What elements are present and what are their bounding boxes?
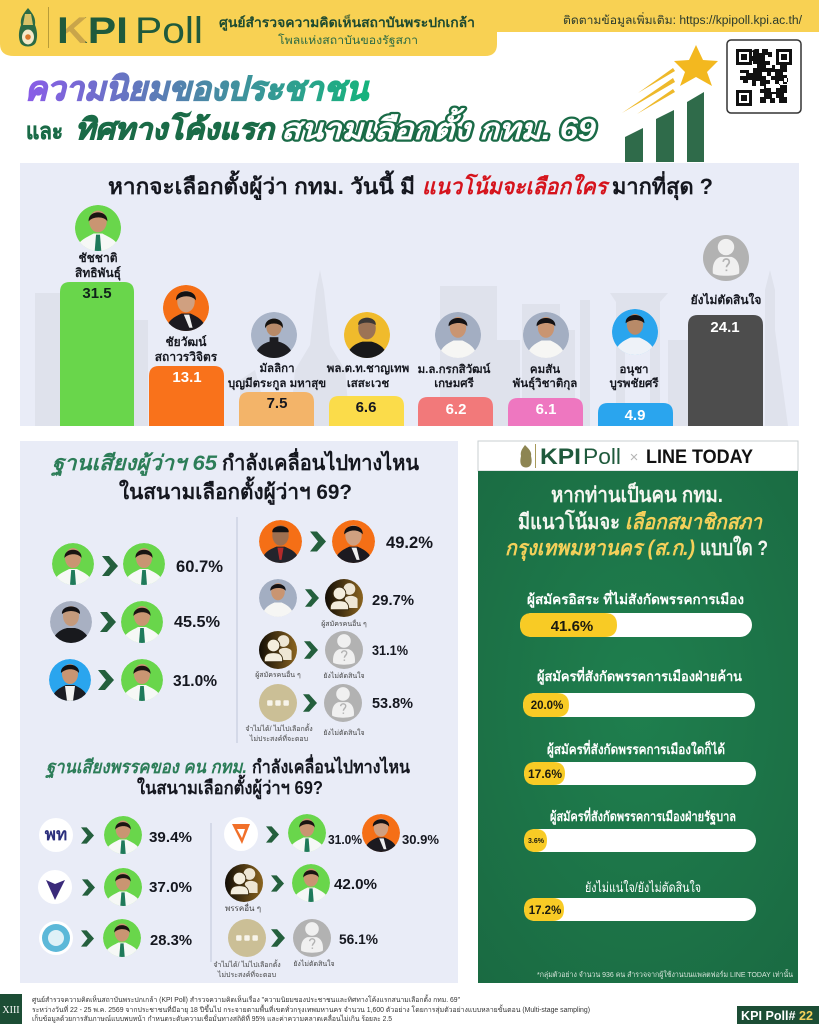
bar: any party 17.6%: ผู้สมัครที่สังกัดพรรคการเมืองใดก็ได้ xyxy=(547,739,725,758)
row: orange to Chaiwat 49.2% xyxy=(259,520,433,563)
row: no answer to undecided 56.1%: 56.1% xyxy=(339,931,379,947)
logo: KPI Poll: KPI xyxy=(57,10,128,51)
logo: KPI Poll x LINE TODAY: KPI xyxy=(540,444,581,469)
panel: mayor voting intention xyxy=(20,163,799,426)
bar: Anucha 4.9 xyxy=(598,309,673,426)
bar: Mallika 7.5 xyxy=(228,312,326,426)
main title line 2: สนามเลือกตั้ง กทม. 69 xyxy=(281,107,596,146)
badge: KPI Poll 22: KPI Poll# 22 xyxy=(741,1008,813,1023)
bar: Komsan 6.1: พันธุ์วิชาติกุล xyxy=(513,376,577,391)
heading: party base: ฐานเสียงพรรคของ คน กทม. xyxy=(45,757,247,779)
row: Wiroj to Chatchart 45.5% xyxy=(50,601,220,643)
heading: governor 65 base xyxy=(51,447,420,506)
footer methodology text: เก็บข้อมูลด้วยการสัมภาษณ์แบบพบหน้า กำหนดระดับความเชื่อมั่นทางสถิติที่ 95% และค่าความคลาดเคลื่อนไม่เกิน ร้อยละ 2.5 xyxy=(32,1014,392,1023)
QR code xyxy=(727,40,801,113)
row: Democrat to Chatchart 28.3% xyxy=(39,919,192,957)
bar: Narakorn 6.2: ม.ล.กรกสิวัฒน์ xyxy=(418,362,491,376)
heading: council question xyxy=(505,481,768,561)
footer methodology text xyxy=(32,993,590,1023)
subheading: institute tagline: โพลแห่งสถาบันของรัฐสภา xyxy=(278,33,418,47)
heading: poll question: หากจะเลือกตั้งผู้ว่า กทม. วันนี้ มี xyxy=(108,170,415,201)
row: no answer to undecided 53.8%: จำไม่ได้/ ไม่ไปเลือกตั้ง xyxy=(245,722,313,733)
row: Chatchart to Chatchart 60.7% xyxy=(52,543,223,585)
bar: Anucha 4.9: อนุชา xyxy=(619,364,649,377)
bar: Narakorn 6.2: 6.2 xyxy=(446,401,466,418)
bar: Anucha 4.9: 4.9 xyxy=(625,407,645,424)
bar: Chatchart 31.5: สิทธิพันธุ์ xyxy=(75,266,121,281)
heading: party base: ในสนามเลือกตั้งผู้ว่าฯ 69? xyxy=(137,774,323,800)
logo: KPI Poll x LINE TODAY: LINE TODAY xyxy=(646,447,753,468)
row: other candidates to undecided 31.1%: ยังไม่ตัดสินใจ xyxy=(323,671,365,680)
heading: governor 65 base: กำลังเคลื่อนไปทางไหน xyxy=(222,447,420,475)
icon: institute emblem xyxy=(19,8,37,46)
bar: Komsan 6.1: 6.1 xyxy=(536,401,556,418)
row: Pheu Thai to Chatchart 39.4% xyxy=(39,816,192,854)
row: Wiroj to Chatchart 45.5%: 45.5% xyxy=(174,614,220,631)
bar: Narakorn 6.2: เกษมศรี xyxy=(434,377,475,390)
bar: any party 17.6%: 17.6% xyxy=(528,767,562,781)
footer methodology text: ระหว่างวันที่ 22 - 25 พ.ค. 2569 จากประชาชนที่มีอายุ 18 ปีขึ้นไป กระจายตามพื้นที่เขตทั่วกรุงเทพมหานคร จำนวน 1,600 ตัวอย่าง โดยการสุ่มตัวอย่างแบบหลายขั้นตอน (Multi-stage sampling) xyxy=(32,1003,590,1014)
row: Chatchart to Chatchart 60.7%: 60.7% xyxy=(176,558,223,576)
row: other parties to Chatchart 42.0%: พรรคอื่น ๆ xyxy=(225,902,261,913)
heading: governor 65 base: ในสนามเลือกตั้งผู้ว่าฯ 69? xyxy=(119,476,352,506)
row: Aswin to other candidates 29.7% xyxy=(259,579,414,628)
heading: council question: เลือกสมาชิกสภา xyxy=(625,510,763,534)
logo: KPI Poll xyxy=(57,10,203,51)
row: no answer to undecided 56.1%: ไม่ประสงค์ที่จะตอบ xyxy=(217,970,276,979)
row: other candidates to undecided 31.1%: ผู้สมัครคนอื่น ๆ xyxy=(255,670,301,679)
bar: undecided 24.1 xyxy=(688,235,763,426)
bar: Narakorn 6.2 xyxy=(418,312,493,426)
logo: KPI Poll: Poll xyxy=(135,10,203,51)
heading: council question: มีแนวโน้มจะ xyxy=(518,509,620,534)
bar: Mallika 7.5: บุญมีตระกูล มหาสุข xyxy=(228,377,326,391)
bar: Mallika 7.5: มัลลิกา xyxy=(259,362,295,375)
row: no answer to undecided 56.1% xyxy=(213,919,379,979)
bar: Chaiwat 13.1 xyxy=(149,285,224,426)
row: Pheu Thai to Chatchart 39.4%: 39.4% xyxy=(149,830,192,846)
bar: Chanyathep 6.6 xyxy=(327,312,409,426)
row: no answer to undecided 56.1%: จำไม่ได้/ ไม่ไปเลือกตั้ง xyxy=(213,958,281,969)
header band xyxy=(0,0,819,56)
panel: vote base shifts xyxy=(20,441,458,983)
bar: Chaiwat 13.1: 13.1 xyxy=(172,369,202,386)
row: no answer to undecided 53.8%: 53.8% xyxy=(372,695,413,712)
heading: institute name: ศูนย์สำรวจความคิดเห็นสถาบันพระปกเกล้า xyxy=(219,13,475,31)
row: Bhumjaithai to Chatchart 37.0% xyxy=(38,868,192,906)
row: no answer to undecided 53.8% xyxy=(245,684,413,743)
heading: governor 65 base: ฐานเสียงผู้ว่าฯ 65 xyxy=(51,451,217,477)
bar: Chanyathep 6.6: พล.ต.ท.ชาญเทพ xyxy=(327,363,409,375)
bar: undecided 24.1: ยังไม่ตัดสินใจ xyxy=(691,292,761,307)
bar: government 3.6%: ผู้สมัครที่สังกัดพรรคการเมืองฝ่ายรัฐบาล xyxy=(550,807,736,826)
bar: Komsan 6.1: คมสัน xyxy=(530,363,560,376)
bar: Chatchart 31.5: ชัชชาติ xyxy=(79,251,118,265)
row: Pheu Thai to Chatchart 39.4%: พท xyxy=(45,825,67,844)
bar: Mallika 7.5: 7.5 xyxy=(267,395,287,412)
row: Bhumjaithai to Chatchart 37.0%: 37.0% xyxy=(149,880,192,896)
row: no answer to undecided 53.8%: ไม่ประสงค์ที่จะตอบ xyxy=(249,734,308,743)
row: orange to Chaiwat 49.2%: 49.2% xyxy=(386,534,433,552)
panel: LINE TODAY council poll xyxy=(478,441,798,983)
main title line 2: ทิศทางโค้งแรก xyxy=(75,112,277,146)
badge: issue XIII: XIII xyxy=(2,1005,20,1016)
note: LINE TODAY sample: *กลุ่มตัวอย่าง จำนวน 936 คน สำรวจจากผู้ใช้งานบนแพลตฟอร์ม LINE TODAY เท่านั้น xyxy=(537,969,793,979)
bar: opposition 20.0%: ผู้สมัครที่สังกัดพรรคการเมืองฝ่ายค้าน xyxy=(537,666,743,685)
row: People's Party to two candidates xyxy=(224,814,439,852)
main title line 2 xyxy=(26,107,596,146)
row: other parties to Chatchart 42.0%: 42.0% xyxy=(334,877,377,893)
row: other candidates to undecided 31.1% xyxy=(255,631,408,680)
bar: unsure 17.2%: ยังไม่แน่ใจ/ยังไม่ตัดสินใจ xyxy=(585,879,701,895)
bar: government 3.6% xyxy=(524,807,756,852)
bar: independent 41.6%: ผู้สมัครอิสระ ที่ไม่สังกัดพรรคการเมือง xyxy=(527,589,744,608)
bar: undecided 24.1: 24.1 xyxy=(710,319,740,336)
row: Aswin to other candidates 29.7%: 29.7% xyxy=(372,592,414,609)
row: no answer to undecided 53.8%: ยังไม่ตัดสินใจ xyxy=(323,728,365,737)
row: Democrat to Chatchart 28.3%: 28.3% xyxy=(150,933,192,949)
main title line 1: ความนิยมของประชาชน xyxy=(25,70,369,107)
heading: party base xyxy=(45,754,411,800)
bar: Chanyathep 6.6: เสสะเวช xyxy=(347,378,389,390)
row: other parties to Chatchart 42.0% xyxy=(225,864,377,913)
row: People's Party to two candidates: 31.0% xyxy=(328,832,362,847)
bar: Chatchart 31.5 xyxy=(60,205,134,426)
row: Suchatvee to Chatchart 31.0% xyxy=(49,659,217,701)
icon: rising bars with star xyxy=(622,45,718,162)
heading: party base: กำลังเคลื่อนไปทางไหน xyxy=(252,754,411,777)
bar: Chanyathep 6.6: 6.6 xyxy=(356,399,376,416)
row: Suchatvee to Chatchart 31.0%: 31.0% xyxy=(173,673,217,690)
city skyline background xyxy=(35,270,788,426)
bar: Anucha 4.9: บูรพชัยศรี xyxy=(609,377,659,391)
heading: council question: กรุงเทพมหานคร (ส.ก.) xyxy=(505,537,695,561)
bar: Chaiwat 13.1: ชัยวัฒน์ xyxy=(166,335,207,349)
main title line 2: และ xyxy=(26,118,63,144)
bar: independent 41.6% xyxy=(520,589,752,637)
row: other candidates to undecided 31.1%: 31.1% xyxy=(372,642,408,658)
row: People's Party to two candidates: 30.9% xyxy=(402,832,439,847)
bar: opposition 20.0% xyxy=(523,666,755,717)
bar: government 3.6%: 3.6% xyxy=(528,838,545,845)
footer methodology text: ศูนย์สำรวจความคิดเห็นสถาบันพระปกเกล้า (KPI Poll) สำรวจความคิดเห็นเรื่อง "ความนิยมของประชาชนและทิศทางโค้งแรกสนามเลือกตั้ง กทม. 69" xyxy=(32,993,460,1004)
row: no answer to undecided 56.1%: ยังไม่ตัดสินใจ xyxy=(293,959,335,968)
logo: KPI Poll x LINE TODAY: Poll xyxy=(583,444,621,469)
logo: KPI Poll x LINE TODAY xyxy=(520,444,753,469)
heading: poll question: แนวโน้มจะเลือกใคร xyxy=(422,173,610,199)
bar: unsure 17.2% xyxy=(524,879,756,921)
bar: Chaiwat 13.1: สถาวรวิจิตร xyxy=(155,350,218,364)
row: Aswin to other candidates 29.7%: ผู้สมัครคนอื่น ๆ xyxy=(321,619,367,628)
heading: poll question xyxy=(108,170,713,201)
heading: council question: หากท่านเป็นคน กทม. xyxy=(551,481,723,507)
bar: opposition 20.0%: 20.0% xyxy=(531,700,563,712)
bar: unsure 17.2%: 17.2% xyxy=(529,905,561,917)
heading: council question: แบบใด ? xyxy=(700,535,768,560)
bar: any party 17.6% xyxy=(524,739,756,785)
bar: independent 41.6%: 41.6% xyxy=(551,618,593,635)
logo: KPI Poll x LINE TODAY: × xyxy=(630,449,638,466)
text: follow link: ติดตามข้อมูลเพิ่มเติม: https://kpipoll.kpi.ac.th/ xyxy=(563,12,803,27)
bar: Komsan 6.1 xyxy=(508,312,583,426)
heading: poll question: มากที่สุด ? xyxy=(612,170,713,201)
bar: Chatchart 31.5: 31.5 xyxy=(82,285,112,302)
badge: issue XIII xyxy=(0,994,22,1024)
